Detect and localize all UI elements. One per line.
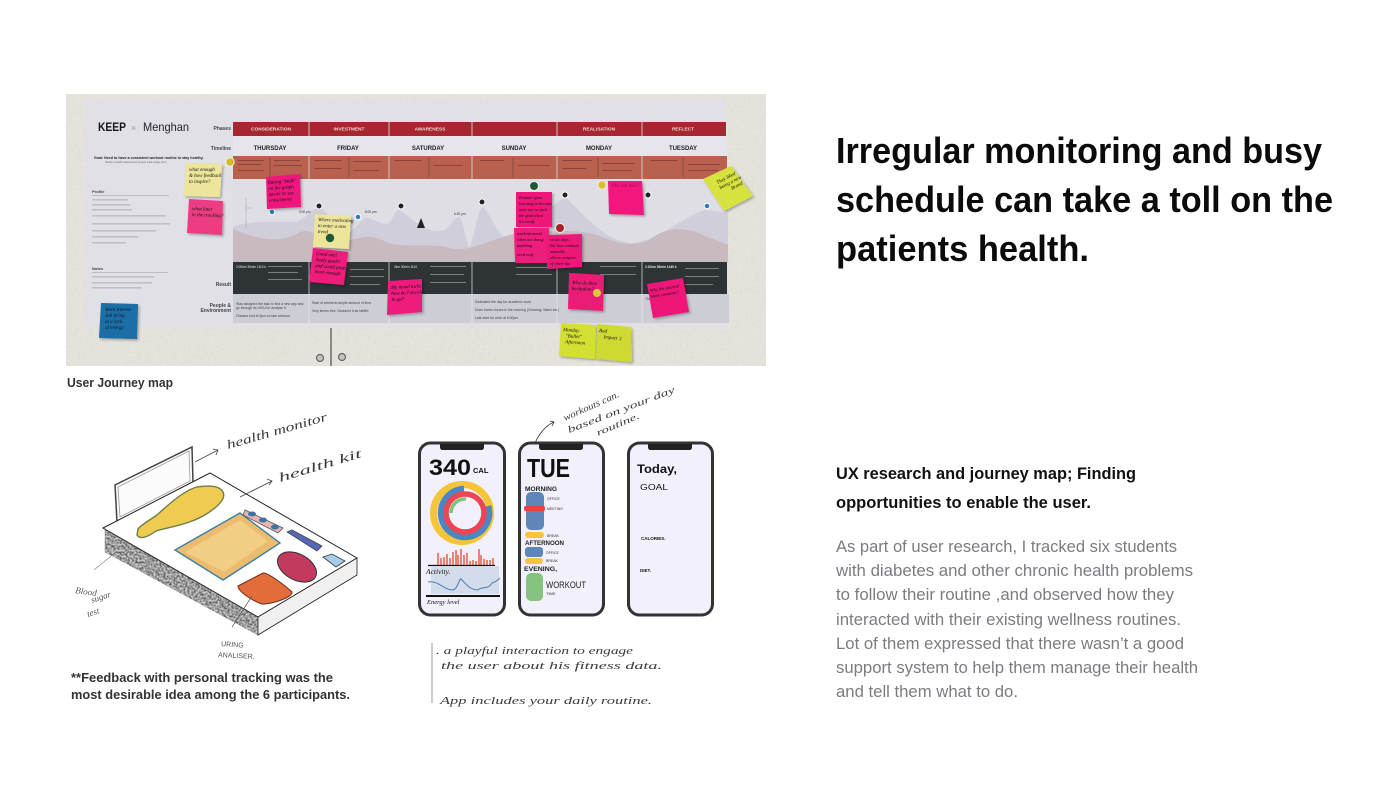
row labels: People & [210,303,231,309]
timeline row: MONDAY [586,146,612,152]
results row [233,262,727,294]
morning block: MEETING [547,507,563,511]
people and environment row: Start of weekend ample amount of time. [312,301,372,305]
body paragraph: with diabetes and other chronic health problems [835,561,1193,580]
timeline row: SATURDAY [412,146,444,152]
sticky note: pink blank [608,181,644,215]
day heading: TUE [527,453,570,483]
main heading: schedule can take a toll on the [836,179,1333,220]
sticky note: yellow with green dot: trend [318,230,329,235]
body paragraph: support system to help them manage their health [836,658,1198,677]
handwriting: urine analyser [218,641,255,661]
goal text: Needs a health assessment to keep track longer term [105,160,166,164]
wall screws [316,354,346,362]
kit tray top [103,473,357,617]
sticky note: on days [547,234,582,269]
sticky note: workout: when not doing [517,237,544,242]
notes section: Notes [92,266,104,271]
evening block [524,567,586,601]
sticky note: what worked: & how feedback [189,174,222,179]
sticky note: on days: of where the [550,261,570,266]
phone 3: today [628,443,712,615]
evening block: EVENING, [524,567,557,573]
sticky note: routine: the goal when [519,213,543,218]
sticky note: lime left: Afternoon [564,340,586,347]
sticky note: study goals: more enough [314,270,341,277]
morning block: MORNING [525,487,557,493]
sticky note: blue [99,303,138,339]
phases row: REALISATION [583,126,616,132]
emotion curve chart [233,179,728,262]
sticky note: journal: more constant? [650,289,680,299]
people and environment row: The day is scheduled [645,297,677,301]
emotion curve chart: 6:30 pm [454,212,466,216]
subheading [836,465,1136,512]
monitor screen [115,447,193,522]
sticky note: lime angled [703,166,753,211]
sticky note: yellow with green dot [313,214,354,249]
sticky note: journal: Why the journal [649,283,680,293]
sticky note: study goals: Study goals! [315,258,341,265]
body paragraph: Lot of them expressed that there wasn’t a good [836,634,1184,653]
afternoon block: AFTERNOON [525,541,564,547]
sticky note: routine: time-use to stick [519,207,547,212]
item: bottle [137,486,224,538]
item: orange wallet [238,573,292,604]
calories heading: CAL [473,466,489,475]
wall panel seam [330,328,332,366]
pointer line: blood sugar [94,552,116,570]
sticky note: lime angled: Brand [731,181,744,192]
brand title: Menghan [143,120,189,134]
kit tray right side [258,558,357,635]
sticky note: study goals [309,248,348,285]
phone 2: daily routine [520,385,678,615]
item: tablet [175,513,280,580]
main heading [836,130,1333,269]
photo caption: User Journey map [67,376,173,390]
sketch caption: most desirable idea among the 6 participants. [71,688,350,702]
notes section [92,266,168,288]
handwriting: workouts note: based on your day [566,385,678,436]
sticky note: workout [514,228,549,263]
sticky note: routine: learning to become [519,201,552,206]
afternoon block: OFFICE [546,551,559,555]
sticky note: tracking: in the tracking? [192,213,224,219]
arrow: health monitor [195,449,218,462]
sticky note: lime right: Impact :( [602,335,622,342]
sticky note: what worked: what enough [189,168,215,173]
emotion curve chart: 8:00 pm [365,210,377,214]
emotion curve chart: 5:00 pm [299,210,311,214]
timeline row: THURSDAY [254,146,286,152]
sticky note: lime angled: They liked [716,172,737,186]
sticky note: lime left [559,323,596,359]
sticky note: rating: consistency [269,197,293,204]
today goal labels [637,462,677,573]
arrow: workouts note [535,421,554,443]
sticky note: lime right [596,324,632,362]
results row: 2.10km 35min 1440 k [645,265,677,269]
timeline row: TUESDAY [669,146,697,152]
today goal labels: Today, [637,462,677,476]
sticky note: tracking: what later [192,207,213,213]
handwriting: blood sugar test: test [86,605,101,619]
activity bars [428,549,495,566]
sticky note: rating: Rating "Walk" [267,179,298,186]
sticky note: workout: need only [517,252,534,257]
sticky note: routine: Routine upon [518,195,542,200]
people and environment row: Late start for work at 5:00pm. [475,316,519,320]
sticky note: lime left: "Bullet" [565,334,583,340]
sticky note: yellow with green dot: Where motivating [318,218,354,224]
sticky note: my mood: how do I decide [391,290,424,297]
sticky note: with yellow dot [568,273,604,311]
profile section [92,189,170,243]
row labels: Result [216,282,231,288]
handwritten notes: App includes your daily routine. [439,695,652,707]
brand title: KEEP [98,122,126,134]
phone body [520,443,604,615]
sticky note: tracking [187,199,224,235]
body paragraph: As part of user research, I tracked six students [836,537,1177,556]
people and environment row: Does home chores in the morning (Cleaning, Wash etc.) [475,308,559,312]
wall background [66,94,766,366]
sticky note: with yellow dot: Why do they [572,281,598,287]
handwriting: blood sugar test: sugar [90,589,113,605]
sketch: health kit [75,410,364,661]
energy label: Energy level [426,599,460,606]
morning block: BREAK [547,534,560,538]
results row: 2km 30min 1110 [394,265,417,269]
phases row: INVESTMENT [334,126,365,132]
sticky note: pink blank: Why not this? [611,184,639,189]
goal text: Goal: Need to have a consistent workout routine to stay healthy. [94,156,204,160]
sticky note: my mood: to go? [391,297,405,303]
sticky note: routine [516,192,552,227]
results row: 2:00km 35min 1110 k [236,265,266,269]
body paragraph: interacted with their existing wellness routines. [836,610,1181,629]
calories heading: 340 [429,455,471,480]
body paragraph: and tell them what to do. [836,682,1018,701]
phases row: CONSIDERATION [251,126,291,132]
people and environment row: Classes end at 6pm so late workout [236,314,290,318]
item: small blue device [323,554,345,567]
evening block: WORKOUT [546,580,586,590]
phases row [233,122,726,136]
handwriting: health kit: health kit [277,446,364,485]
item: red oval [272,546,322,588]
sticky note: yellow with green dot: to enter a new [318,224,347,230]
sticky note: lime angled: being a new [719,175,743,191]
sticky note: blue: Work Intense [105,308,132,313]
sticky note: workout: anything [517,243,533,248]
sticky note: blue: Job tiring [105,314,125,319]
brand title: × [131,123,136,133]
sticky note: routine: it's ready [519,219,535,224]
sticky note: on days: on the days [550,237,569,242]
handwriting: blood sugar test: Blood [75,585,98,598]
subheading: UX research and journey map; Finding [836,465,1136,483]
people and environment row [233,294,729,323]
morning block [524,487,563,538]
body paragraph [835,537,1198,701]
main heading: Irregular monitoring and busy [836,130,1322,171]
handwritten notes: the user about his fitness data. [441,660,662,672]
sketch caption: **Feedback with personal tracking was the [71,671,333,685]
panel: journey map photo [66,94,766,366]
people and environment row: go through its UX/UI to analyse it. [236,306,287,310]
sticky note: study goals: Good one! [316,252,338,259]
handwriting: workouts note [562,385,678,439]
people and environment row: Dedicated the day for academic work. [475,300,532,304]
coloured status dots [226,158,606,232]
people and environment row: Was assigned the task to find a new app and [236,302,303,306]
arrow: health kit [240,479,272,497]
today goal labels: GOAL [640,482,668,492]
main heading: patients health. [836,228,1089,269]
sticky note: on days: like how constant [550,243,580,248]
timeline row: SUNDAY [502,146,526,152]
row labels: Phases [213,126,231,132]
morning block: OFFICE [547,497,560,501]
row labels: Environment [200,308,231,314]
row labels: Timeline [211,146,231,152]
handwritten notes: . a playful interaction to engage [436,645,633,657]
people and environment row: Very stress free. Declared it as Netflix [312,309,369,313]
phases row: REFLECT [672,126,694,132]
phone 1: calories [420,443,504,615]
chart markers [316,192,651,209]
evening block: TIME [546,591,556,596]
item: blue bar [287,530,322,551]
pointer line: urine analyser [232,596,252,627]
brand title [98,120,189,134]
sticky note: on days: naturally [550,249,565,254]
sticky note: journal [647,278,689,318]
today goal labels: CALORIES. [641,536,666,541]
handwritten notes [432,643,662,707]
timeline row: FRIDAY [337,146,359,152]
sticky note: my mood [387,279,424,315]
handwriting: urine analyser: ANALISER. [218,652,255,661]
today goal labels: DIET. [640,568,651,573]
sketch caption [71,671,350,702]
sticky note: with yellow dot: hesitation? [572,287,595,293]
calories heading [429,455,489,480]
phone body [420,443,504,615]
paper sheet [84,100,729,328]
sticky note: workout: workout mood [517,231,543,236]
energy chart [426,566,500,596]
sticky note: lime left: Monday [562,328,580,334]
sticky note: what worked [184,163,222,197]
body paragraph: to follow their routine ,and observed how they [836,585,1174,604]
subheading: opportunities to enable the user. [836,494,1091,512]
afternoon block [525,541,564,564]
handwriting: blood sugar test [75,585,113,619]
activity rings [434,484,490,542]
timeline row [233,136,727,156]
handwriting: workouts note: routine. [595,412,642,439]
handwriting: urine analyser: URING [221,641,244,650]
sticky note: blue: of energy [105,326,124,331]
phases row: AWARENESS [415,126,446,132]
handwriting: health monitor: health monitor [225,410,329,452]
profile section: Profile [92,189,105,194]
sticky note: blue: at a lack [105,320,123,325]
sticky note: my mood: My mood lacks [390,284,421,291]
kit tray left side [105,530,258,635]
sticky note: study goals: and could push [315,264,346,272]
handwriting: workouts note: workouts can. [562,390,621,424]
sticky note: lime right: Bad [599,329,608,335]
sticky note: rating: on the graph [268,185,295,192]
activity label: Activity. [425,567,450,576]
sticky note: rating [266,174,301,209]
sticky note: what worked: to inspire? [189,180,211,185]
row labels [200,126,231,314]
activity row [233,156,727,179]
sticky note: on days: allows compare [550,255,576,260]
phone body [628,443,712,615]
goal text [94,156,204,164]
item: pill tray [243,510,283,533]
afternoon block: BREAK [546,559,559,563]
sticky note: rating: easier to see [269,191,295,198]
